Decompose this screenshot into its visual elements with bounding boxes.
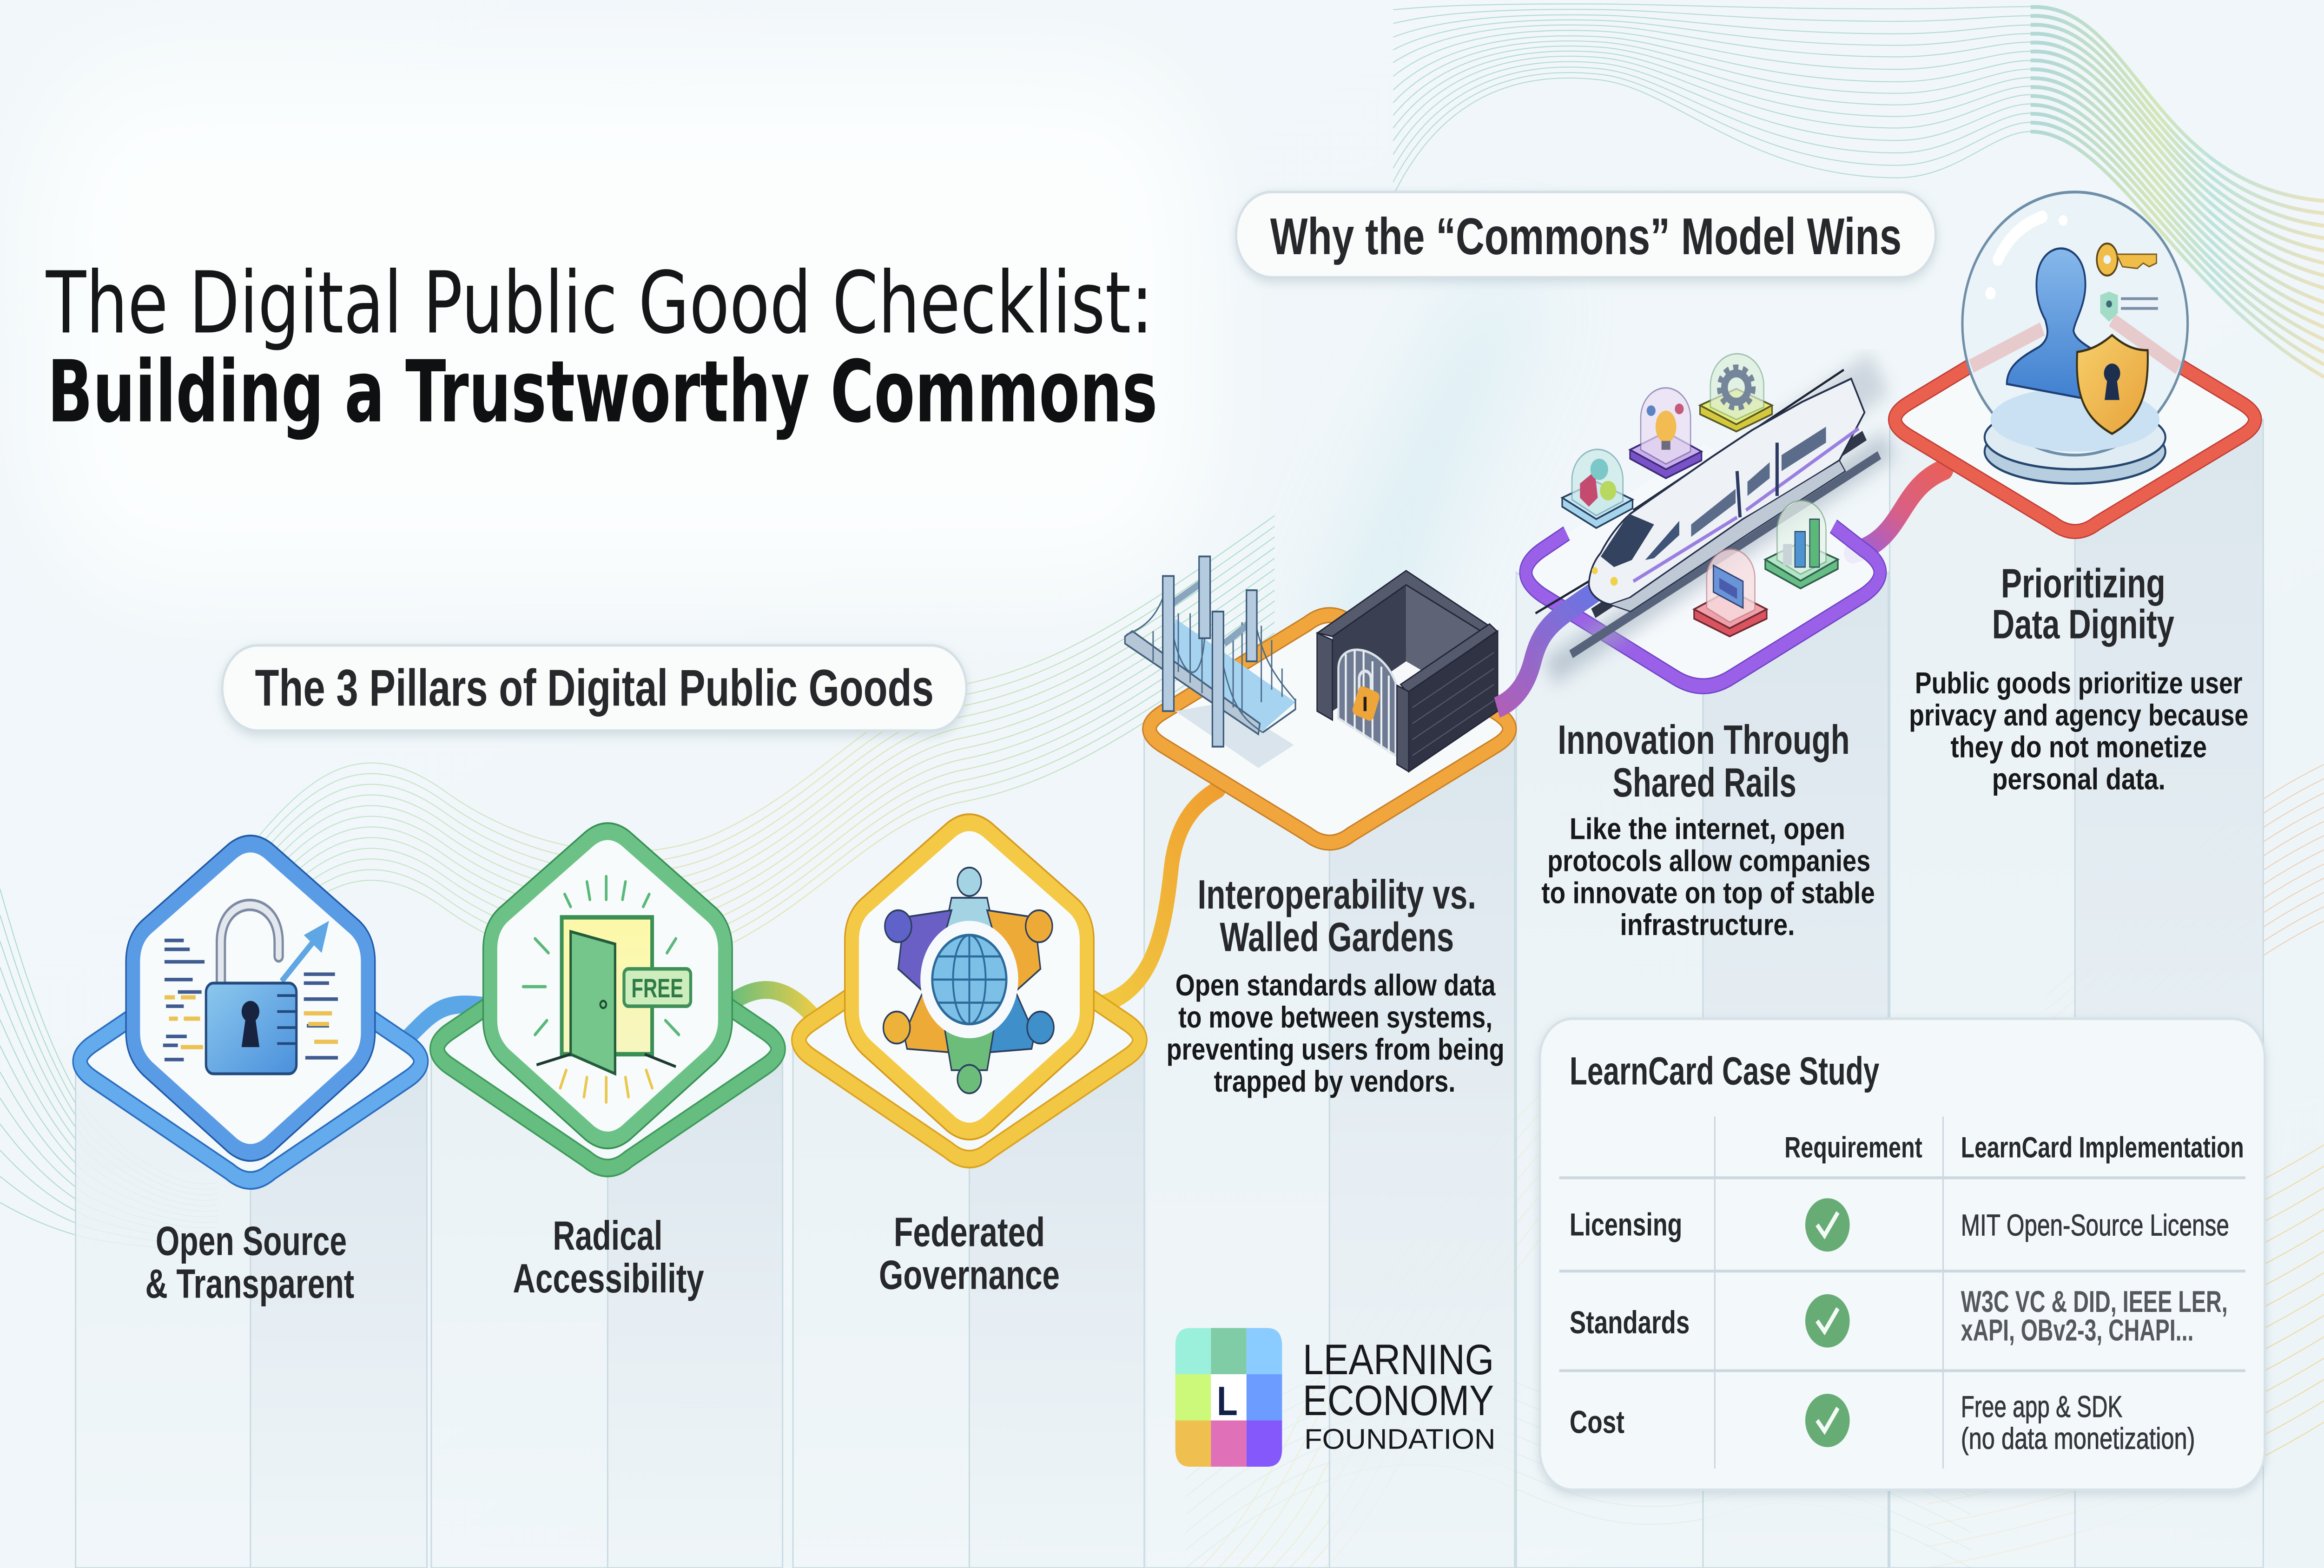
connector: green to yellow <box>726 990 818 1022</box>
decorative wave lines: teal top left part <box>1393 4 2031 196</box>
train windows <box>1601 514 1654 567</box>
icon: module bubble red <box>1694 549 1767 636</box>
logo mark: L <box>1217 1379 1238 1424</box>
row: cost: Cost <box>1570 1404 1624 1440</box>
table header <box>1784 1131 2244 1164</box>
text block: interoperability: to move between systems, <box>1178 1000 1492 1034</box>
decorative wave lines: bottom green <box>1186 1357 1971 1568</box>
row: licensing: MIT Open-Source License <box>1961 1208 2229 1242</box>
card heading: LearnCard Case Study <box>1570 1050 1879 1093</box>
text block: prioritizing data dignity: privacy and agency because <box>1909 698 2248 732</box>
table grid <box>1559 1116 2245 1469</box>
person <box>2007 249 2102 402</box>
label: radical accessibility: Accessibility <box>513 1256 704 1302</box>
icon: module bubble purple <box>1630 388 1702 478</box>
wall faces <box>1317 633 1333 720</box>
hexagon badge <box>490 832 725 1140</box>
row: licensing: Licensing <box>1570 1207 1682 1243</box>
label: federated governance: Federated <box>894 1210 1045 1255</box>
text block: interoperability: Walled Gardens <box>1220 915 1454 960</box>
decorative wave lines: yellow near logo <box>1201 1084 1673 1568</box>
heading pill: why the commons model wins <box>1236 192 1936 277</box>
label: federated governance <box>879 1210 1060 1298</box>
title: Building a Trustworthy Commons <box>47 342 1157 441</box>
row: standards: Standards <box>1570 1305 1690 1340</box>
icon: open door with free sign: FREE <box>631 974 683 1003</box>
row: licensing <box>1570 1198 2229 1252</box>
padlock <box>1359 671 1371 697</box>
text block: interoperability: trapped by vendors. <box>1214 1064 1455 1098</box>
pillar 4: interoperability platform <box>1125 556 1510 843</box>
icon: train on rails <box>1536 370 1890 672</box>
column 1 <box>76 1061 427 1568</box>
diamond platform <box>80 942 421 1180</box>
pillar 3: federated governance <box>799 823 1140 1159</box>
decorative wave lines: left green fan <box>0 889 218 1250</box>
decorative wave lines: right pink yellow <box>2046 764 2324 1152</box>
text block: innovation through shared rails <box>1541 718 1875 942</box>
heading pill: the 3 pillars: The 3 Pillars of Digital Public Goods <box>255 659 934 717</box>
logo wordmark: LEARNING <box>1303 1335 1494 1384</box>
decorative wave lines: bottom right <box>1927 1145 2324 1568</box>
connector: blue to green <box>400 1004 486 1045</box>
globe base <box>1985 420 2166 484</box>
text block: innovation through shared rails: Innovation Through <box>1558 718 1850 763</box>
icon: module bubble chart <box>1765 501 1838 588</box>
bridge towers <box>1163 556 1257 747</box>
connector paths <box>400 469 1945 1045</box>
motion streaks <box>1764 373 1879 453</box>
connector: yellow to orange <box>1094 789 1218 1006</box>
title <box>46 253 1157 441</box>
diamond platform <box>799 921 1140 1159</box>
text block: prioritizing data dignity: Public goods prioritize user <box>1915 666 2243 700</box>
row: cost: (no data monetization) <box>1961 1422 2195 1456</box>
label: federated governance: Governance <box>879 1252 1060 1298</box>
diamond platform <box>1895 308 2255 532</box>
icon: walled garden <box>1317 571 1498 771</box>
text block: prioritizing data dignity: they do not monetize <box>1950 730 2207 764</box>
text block: innovation through shared rails: Like the internet, open <box>1570 812 1845 846</box>
icon: people around globe <box>884 868 1054 1094</box>
text block: prioritizing data dignity: Prioritizing <box>2001 561 2166 606</box>
key <box>2097 244 2157 276</box>
pillar 6: data dignity platform <box>1895 192 2255 532</box>
text block: innovation through shared rails: infrastructure. <box>1620 908 1795 942</box>
decorative wave lines: middle band <box>259 515 1274 969</box>
people <box>884 868 1054 1094</box>
row: standards: W3C VC & DID, IEEE LER, <box>1961 1285 2228 1318</box>
shield <box>2077 335 2148 434</box>
column 4 <box>1144 729 1515 1568</box>
column 2 <box>431 1049 783 1568</box>
credential <box>2100 291 2158 322</box>
text block: innovation through shared rails: to innovate on top of stable <box>1541 876 1875 909</box>
pillar columns <box>76 420 2263 1568</box>
decorative wave lines: top right descending <box>2031 7 2324 377</box>
logo wordmark <box>1303 1335 1495 1455</box>
row: standards <box>1570 1285 2228 1348</box>
diamond platform <box>1149 615 1510 843</box>
pillar 1: open source <box>80 844 421 1180</box>
icon: module bubble gear <box>1700 354 1772 431</box>
connector: purple to red <box>1853 469 1945 553</box>
hexagon badge <box>133 844 368 1152</box>
column 5 <box>1516 573 1888 1568</box>
connector: orange to purple <box>1497 592 1595 708</box>
logo wordmark: FOUNDATION <box>1304 1423 1495 1455</box>
table header: Requirement <box>1784 1131 1922 1164</box>
logo: learning economy foundation <box>1175 1328 1495 1467</box>
heading pill: the 3 pillars <box>222 646 966 731</box>
heading pill: why the commons model wins: Why the “Commons” Model Wins <box>1270 208 1901 265</box>
text block: innovation through shared rails: Shared Rails <box>1612 760 1796 805</box>
diamond platform <box>437 930 778 1168</box>
table header: LearnCard Implementation <box>1961 1131 2244 1164</box>
text block: interoperability: Interoperability vs. <box>1198 872 1476 917</box>
text block: prioritizing data dignity: Data Dignity <box>1992 602 2174 647</box>
train stripe <box>1633 428 1859 581</box>
wall rim <box>1318 571 1497 636</box>
car joints <box>1737 443 1777 517</box>
text block: prioritizing data dignity <box>1909 561 2248 796</box>
label: radical accessibility <box>513 1213 704 1302</box>
label: open source and transparent <box>145 1219 354 1307</box>
glass sphere <box>1962 192 2188 455</box>
icon: module bubble teal <box>1562 449 1632 528</box>
text block: interoperability: preventing users from being <box>1167 1032 1505 1066</box>
icon: open padlock <box>163 905 338 1074</box>
text block: innovation through shared rails: protocols allow companies <box>1547 844 1870 878</box>
gate <box>1338 650 1396 756</box>
label: open source and transparent: & Transparent <box>145 1261 354 1307</box>
logo wordmark: ECONOMY <box>1303 1376 1494 1424</box>
icon: bridge <box>1125 556 1295 768</box>
panel: learncard case study <box>1540 1019 2265 1490</box>
column 6 <box>1890 420 2263 1568</box>
globe <box>920 921 1018 1038</box>
text block: prioritizing data dignity: personal data. <box>1992 762 2166 796</box>
hexagon badge <box>852 823 1086 1131</box>
text block: interoperability: Open standards allow data <box>1175 968 1496 1002</box>
train body <box>1589 379 1864 605</box>
label: radical accessibility: Radical <box>553 1213 662 1259</box>
row: cost <box>1570 1390 2195 1456</box>
logo mark <box>1175 1328 1282 1467</box>
pillar 2: radical accessibility <box>437 832 778 1168</box>
rails <box>1571 455 1879 654</box>
platform outline <box>1526 526 1880 686</box>
platform outline highlight <box>1526 526 1880 686</box>
row: cost: Free app & SDK <box>1961 1390 2122 1423</box>
row: standards: xAPI, OBv2-3, CHAPI... <box>1961 1313 2193 1347</box>
back walls <box>1333 585 1406 711</box>
icon: open door with free sign <box>523 876 691 1102</box>
text block: interoperability <box>1167 872 1505 1098</box>
title: The Digital Public Good Checklist: <box>46 253 1153 353</box>
label: open source and transparent: Open Source <box>156 1219 347 1264</box>
column 3 <box>793 1040 1146 1568</box>
pillar 5: shared rails platform <box>1497 354 1890 708</box>
icon: glass globe with person, key and shield <box>1962 192 2188 484</box>
platform fill <box>1526 444 1880 686</box>
